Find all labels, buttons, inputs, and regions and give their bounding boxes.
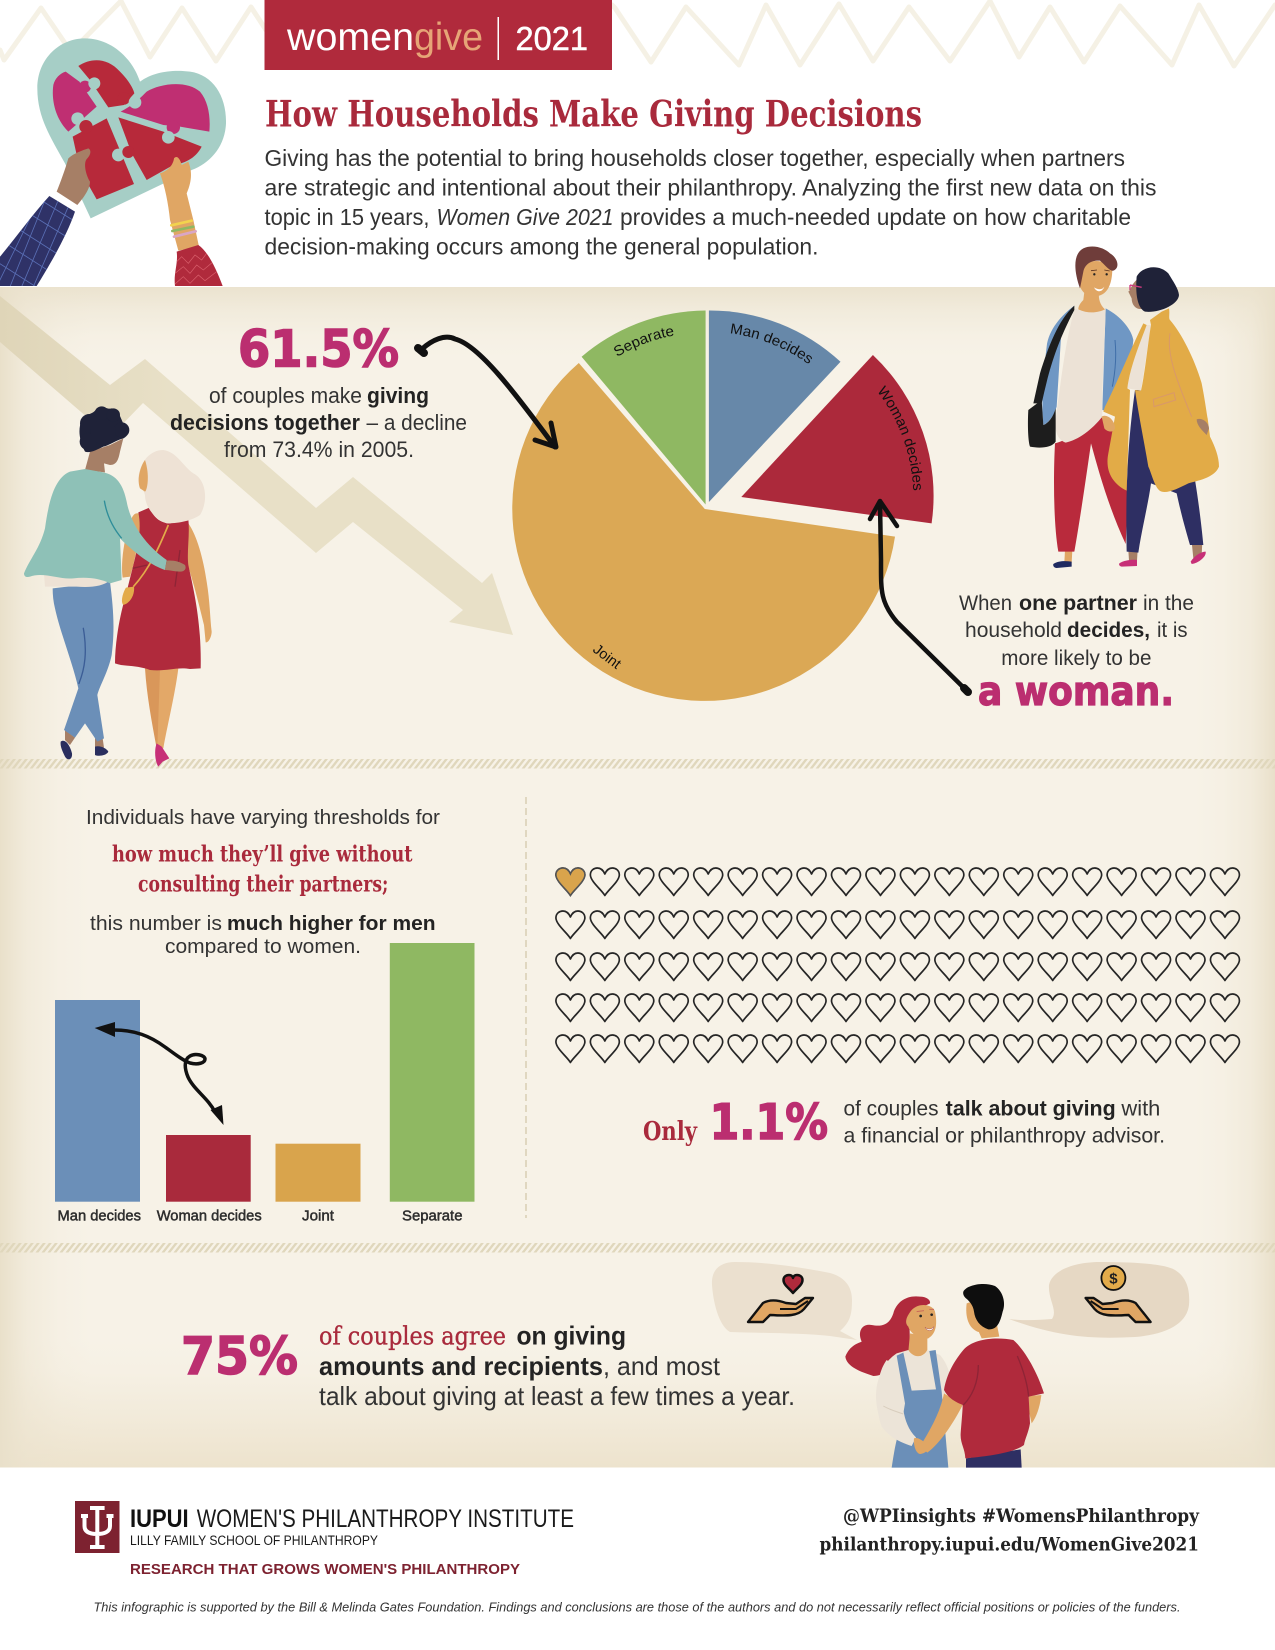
speech bubble: coin in hand: $ [1109,1270,1118,1288]
bar chart: Joint [302,1208,335,1224]
text: one partner decides: more likely to be [1001,646,1152,670]
intro paragraph: provides a much-needed update on how charitable [620,204,1131,230]
text: couples agree: amounts and recipients [319,1351,603,1381]
logo: IU trident mark [75,1501,120,1553]
logo banner: womengive 2021: women [286,16,414,59]
bar chart: Man decides [58,1208,141,1224]
text: institute name: LILLY FAMILY SCHOOL OF PHILANTHROPY [130,1533,378,1548]
intro paragraph: topic in 15 years, [264,204,430,230]
stat: only 1.1 percent: 1.1% [710,1094,828,1151]
text: giving thresholds: Individuals have varying thresholds for [86,806,440,829]
declining trend arrow [0,296,513,635]
text: couples agree: on giving [516,1320,626,1350]
panel: main beige background [0,287,1275,1468]
text: giving thresholds [86,806,440,958]
text: institute name: IUPUI [130,1505,189,1533]
intro paragraph: Women Give 2021 [436,204,614,230]
text: talk about giving with advisor: a financial or philanthropy advisor. [844,1125,1165,1148]
zigzag header pattern [0,1,1275,66]
intro paragraph [264,145,1156,260]
text: giving thresholds: consulting their partners; [138,872,388,898]
bar chart [55,943,474,1224]
pie chart: Joint [590,641,624,673]
pie chart: Man decides [730,324,812,364]
arrow: 61.5 percent to joint slice [418,337,556,447]
illustration: puzzle heart held by two hands [0,38,226,288]
logo banner: womengive 2021: give [414,16,483,59]
arrow: a woman to woman decides slice [870,501,968,692]
bar chart: Woman decides [157,1208,262,1224]
text: couples agree: talk about giving at least a few times a year. [319,1381,795,1411]
stat: 75 percent: 75% [181,1327,298,1387]
text: giving thresholds: how much they’ll give without [112,842,413,868]
text: social links: philanthropy.iupui.edu/WomenGive2021 [820,1534,1199,1556]
logo banner: womengive 2021: 2021 [516,20,588,57]
text: couples decide together [170,383,467,462]
text: talk about giving with advisor: with [1120,1098,1160,1121]
text: one partner decides: When [959,591,1012,615]
speech bubble: coin in hand [1009,1262,1189,1338]
text: institute name [130,1505,574,1578]
text: couples decide together: decisions together [170,410,360,435]
text: social links: @WPIinsights #WomensPhilanthropy [843,1506,1200,1527]
bar chart: Separate [402,1208,462,1224]
pie chart: Separate [614,328,674,356]
logo banner: womengive 2021 [264,0,612,70]
text: couples decide together: giving [367,383,429,408]
text: one partner decides: household [965,618,1062,642]
text: one partner decides: in the [1143,591,1194,615]
arrow: squiggle between man and woman bars [95,1022,224,1125]
illustration: couple holding hands [845,1284,1044,1468]
stat: 61.5 percent: 61.5% [238,320,399,380]
text: talk about giving with advisor: of couples [844,1098,938,1121]
hearts grid: 1.1 percent [556,868,1239,1062]
text: one partner decides: one partner [1019,591,1138,615]
text: one partner decides [959,591,1194,670]
stat: only 1.1 percent [643,1094,828,1151]
intro paragraph: Giving has the potential to bring households closer together, especially when partners [264,145,1125,171]
text: giving thresholds: much higher for men [227,912,436,935]
text: institute name: RESEARCH THAT GROWS WOMEN'S PHILANTHROPY [130,1562,520,1578]
text: one partner decides: it is [1157,618,1188,642]
text: couples decide together: of couples make [209,383,362,408]
text: social links [820,1506,1200,1556]
pie chart [512,310,934,701]
stat: only 1.1 percent: Only [643,1117,698,1147]
title: How Households Make Giving Decisions [265,94,922,136]
intro paragraph: are strategic and intentional about their philanthropy. Analyzing the first new data on this [264,174,1156,200]
pie chart: Woman decides [878,385,922,490]
intro paragraph: decision-making occurs among the general population. [264,234,818,260]
text: couples agree: of couples agree [319,1322,506,1350]
speech bubble: heart in hand [712,1262,857,1340]
text: talk about giving with advisor [844,1098,1165,1148]
text: couples decide together: from 73.4% in 2005. [224,437,414,462]
illustration: couple facing each other [1028,247,1219,568]
disclaimer: This infographic is supported by the Bill & Melinda Gates Foundation. Findings and conclusions are those of the authors and do not necessarily reflect official positions or policies of the funders. [94,1600,1180,1614]
text: talk about giving with advisor: talk about giving [946,1098,1116,1121]
text: institute name: WOMEN'S PHILANTHROPY INSTITUTE [197,1505,574,1533]
text: couples agree: , and most [603,1351,721,1381]
text: couples decide together: – a decline [366,410,467,435]
illustration: couple seen from behind [24,406,212,767]
text: couples agree [319,1320,795,1411]
text: giving thresholds: compared to women. [165,935,361,958]
text: one partner decides: decides, [1067,618,1150,642]
callout: a woman: a woman. [978,669,1174,715]
text: giving thresholds: this number is [90,912,222,935]
